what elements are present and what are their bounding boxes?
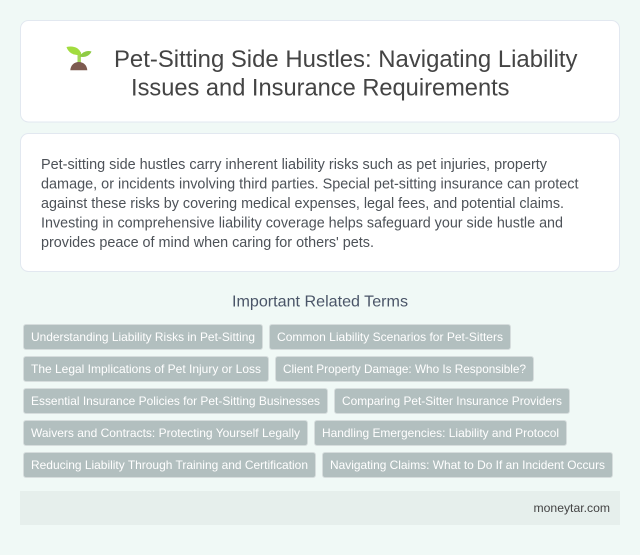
- tag: [314, 420, 566, 446]
- summary text: Pet-sitting side hustles carry inherent liability risks such as pet injuries, property: [41, 157, 548, 173]
- tag: Client Property Damage: Who Is Responsible?: [283, 362, 526, 376]
- tag: Waivers and Contracts: Protecting Yourself Legally: [31, 426, 300, 440]
- tag: [24, 356, 268, 382]
- tag: Navigating Claims: What to Do If an Incident Occurs: [330, 458, 605, 472]
- tag: Comparing Pet-Sitter Insurance Providers: [342, 394, 562, 408]
- summary text: against these risks by covering medical expenses, legal fees, and potential claims.: [41, 196, 564, 212]
- title: Pet-Sitting Side Hustles: Navigating Liability: [114, 46, 578, 73]
- icon: seedling: [66, 46, 92, 70]
- tag: [24, 420, 308, 446]
- tags: related terms: [24, 324, 612, 478]
- tag: Essential Insurance Policies for Pet-Sitting Businesses: [31, 394, 320, 408]
- summary text: [41, 157, 578, 251]
- tag: [24, 452, 316, 478]
- tag: [322, 452, 612, 478]
- tag: [24, 388, 328, 414]
- tag: [334, 388, 570, 414]
- tag: Handling Emergencies: Liability and Protocol: [322, 426, 559, 440]
- tag: [270, 324, 510, 350]
- tag: [276, 356, 534, 382]
- summary text: damage, or incidents involving third parties. Special pet-sitting insurance can protect: [41, 176, 578, 192]
- panel: title card: [20, 20, 620, 122]
- tag: Reducing Liability Through Training and Certification: [31, 458, 308, 472]
- footer: [20, 491, 620, 525]
- summary text: Investing in comprehensive liability coverage helps safeguard your side hustle and: [41, 216, 563, 232]
- title: [114, 46, 578, 102]
- panel: summary card: [20, 134, 620, 272]
- tag: Common Liability Scenarios for Pet-Sitters: [277, 330, 503, 344]
- summary text: provides peace of mind when caring for others' pets.: [41, 235, 374, 251]
- tag: The Legal Implications of Pet Injury or Loss: [31, 362, 261, 376]
- tag: Understanding Liability Risks in Pet-Sitting: [31, 330, 255, 344]
- title: Issues and Insurance Requirements: [131, 74, 510, 102]
- footer: moneytar.com: [534, 501, 610, 515]
- heading: important related terms: Important Related Terms: [232, 294, 408, 310]
- tag: [24, 324, 262, 350]
